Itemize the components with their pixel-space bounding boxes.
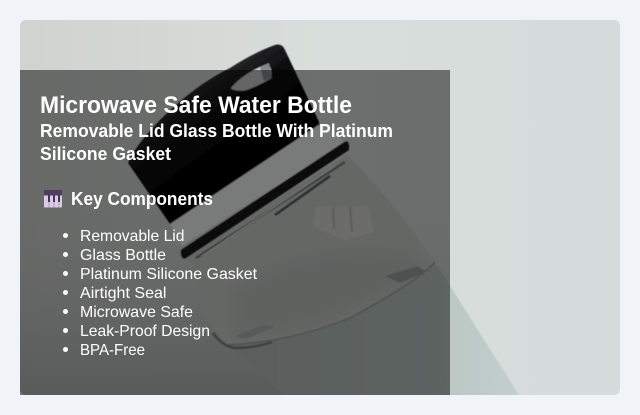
list: components: Airtight Seal — [80, 285, 166, 302]
list: components: Platinum Silicone Gasket — [80, 266, 258, 283]
list: components: BPA-Free — [80, 342, 145, 359]
window reflection — [333, 208, 352, 230]
bottle lower body — [366, 264, 519, 395]
water inside shoulder — [230, 250, 425, 336]
title: Microwave Safe Water Bottle — [40, 92, 352, 119]
subtitle: Removable Lid Glass Bottle With Platinum — [40, 121, 393, 141]
heading: key components: Key Components — [71, 189, 213, 209]
bottle glass shoulder — [216, 172, 346, 344]
silver band, gasket and lid — [128, 45, 349, 258]
list: components: Removable Lid — [80, 228, 184, 245]
lid handle hole — [230, 63, 272, 91]
icon: piano keyboard — [44, 190, 62, 208]
panel: text overlay — [20, 70, 450, 395]
list: components — [63, 228, 258, 359]
waterline rim — [213, 262, 435, 348]
list: components: Microwave Safe — [80, 304, 193, 321]
subtitle — [40, 121, 393, 164]
list: components: Glass Bottle — [80, 247, 166, 264]
neck threads — [196, 162, 345, 258]
list: components: Leak-Proof Design — [80, 323, 210, 340]
subtitle: Silicone Gasket — [40, 144, 171, 164]
